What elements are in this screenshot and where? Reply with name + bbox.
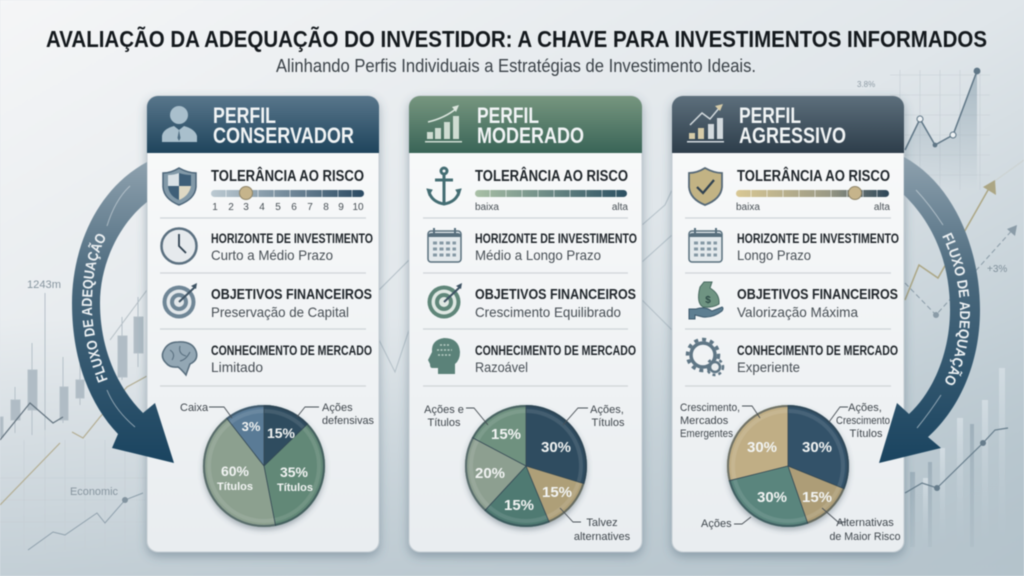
pie chart: agressivo: 30% <box>802 439 832 456</box>
arrow: left flow: FLUXO DE ADEQUAÇÃO <box>81 233 108 384</box>
header: conservador <box>147 96 379 153</box>
horizon text: Curto a Médio Prazo <box>211 247 333 263</box>
pie chart: moderado: 15% <box>542 484 572 501</box>
pie chart: moderado: 30% <box>541 439 571 456</box>
background chart: left <box>0 279 147 550</box>
risk slider: TOLERÂNCIA AO RISCO <box>475 166 628 185</box>
icon: calendar <box>689 228 722 262</box>
objectives text: Preservação de Capital <box>211 304 349 320</box>
risk slider: baixa <box>475 202 499 213</box>
pie labels: moderado: alternatives <box>574 531 631 543</box>
pie chart: moderado: 15% <box>491 426 521 443</box>
pie labels: agressivo: Ações <box>701 518 732 530</box>
icon: target <box>162 283 197 318</box>
arrow: left flow <box>71 162 174 464</box>
pie labels: moderado <box>424 404 631 543</box>
horizon text <box>475 231 637 263</box>
icon: brain <box>162 342 197 375</box>
risk slider: alta <box>612 202 628 213</box>
horizon text: Longo Prazo <box>737 247 811 263</box>
background chart: right: +3% <box>987 264 1007 275</box>
objectives text <box>211 286 372 320</box>
risk slider: 7 <box>307 202 313 213</box>
pie labels: agressivo: de Maior Risco <box>830 531 900 543</box>
icon: clock <box>162 228 196 264</box>
header: moderado: MODERADO <box>477 123 584 148</box>
pie chart: agressivo: 30% <box>747 439 777 456</box>
icon: shield <box>163 168 196 205</box>
risk slider: alta <box>874 202 890 213</box>
panel: perfil conservador <box>147 96 379 552</box>
background chart: left: Economic <box>70 486 118 498</box>
horizon text: Médio a Longo Prazo <box>475 247 601 263</box>
risk slider: 2 <box>228 202 234 213</box>
objectives text <box>475 286 636 320</box>
header: moderado: PERFIL <box>477 103 539 128</box>
objectives text: OBJETIVOS FINANCEIROS <box>737 286 898 303</box>
objectives text: OBJETIVOS FINANCEIROS <box>475 286 636 303</box>
risk slider: 1 <box>212 202 218 213</box>
risk slider: baixa <box>736 202 760 213</box>
pie chart: agressivo: 30% <box>757 489 787 506</box>
panel: perfil agressivo <box>672 96 904 552</box>
risk slider <box>736 166 890 213</box>
risk slider: TOLERÂNCIA AO RISCO <box>211 166 364 185</box>
risk slider <box>475 166 628 213</box>
icon: hand with money bag: $ <box>705 295 711 306</box>
pie labels: agressivo: Emergentes <box>680 428 733 440</box>
horizon text: HORIZONTE DE INVESTIMENTO <box>737 231 899 246</box>
pie labels: conservador: defensivas <box>322 415 374 427</box>
risk slider: 3 <box>243 202 249 213</box>
objectives text: Crescimento Equilibrado <box>475 304 621 320</box>
header: moderado <box>409 96 642 153</box>
knowledge text: Limitado <box>211 359 263 375</box>
pie labels: agressivo: Alternativas <box>836 517 894 529</box>
pie chart: conservador <box>203 405 325 527</box>
knowledge text: CONHECIMENTO DE MERCADO <box>475 343 636 358</box>
pie chart: conservador: 35% <box>280 464 309 480</box>
header: conservador: CONSERVADOR <box>213 123 354 148</box>
background chart: right <box>857 68 1024 547</box>
risk slider: 4 <box>259 202 265 213</box>
header: agressivo: AGRESSIVO <box>739 123 846 148</box>
pie labels: moderado: Ações, <box>590 404 624 416</box>
horizon text: HORIZONTE DE INVESTIMENTO <box>475 231 637 246</box>
knowledge text <box>737 343 898 375</box>
risk slider: 10 <box>352 202 364 213</box>
pie labels: moderado: Talvez <box>586 517 618 529</box>
pie labels: agressivo: Ações, <box>848 402 882 414</box>
pie chart: agressivo <box>727 405 849 527</box>
arrow: right flow <box>878 157 981 464</box>
objectives text <box>737 286 898 320</box>
pie labels: moderado: Ações e <box>424 404 464 416</box>
horizon text <box>737 231 899 263</box>
subtitle: Alinhando Perfis Individuais a Estratégias de Investimento Ideais. <box>276 56 756 76</box>
pie labels: conservador <box>180 402 374 427</box>
background chart: right: 3.8% <box>857 80 875 89</box>
pie labels: moderado: Títulos <box>591 417 625 429</box>
icon: head with brain <box>428 338 460 374</box>
knowledge text <box>475 343 636 375</box>
knowledge text: Razoável <box>475 359 528 375</box>
risk slider <box>211 166 364 213</box>
risk slider: TOLERÂNCIA AO RISCO <box>737 166 890 185</box>
icon: shield with check <box>689 168 722 205</box>
background lines between panels <box>379 190 672 372</box>
icon: calendar <box>428 228 461 262</box>
icon: gears <box>688 340 723 375</box>
pie labels: agressivo: Mercados <box>680 415 729 427</box>
background chart: left: 1243m <box>27 279 61 291</box>
pie labels: conservador: Ações <box>322 402 353 414</box>
pie labels: conservador: Caixa <box>180 402 209 414</box>
pie chart: moderado: 20% <box>475 465 505 482</box>
knowledge text <box>211 343 372 375</box>
objectives text: OBJETIVOS FINANCEIROS <box>211 286 372 303</box>
icon: target <box>428 283 462 318</box>
pie labels: agressivo: Crescimento, <box>680 402 740 414</box>
header: agressivo <box>672 96 904 153</box>
risk slider: 8 <box>323 202 329 213</box>
pie chart: conservador: 15% <box>267 425 296 441</box>
risk slider: 9 <box>338 202 344 213</box>
knowledge text: CONHECIMENTO DE MERCADO <box>737 343 898 358</box>
pie chart: agressivo: 15% <box>802 489 832 506</box>
panel: perfil moderado <box>409 96 642 552</box>
objectives text: Valorização Máxima <box>737 304 858 320</box>
pie labels: moderado: Títulos <box>427 417 461 429</box>
icon: anchor <box>427 168 461 204</box>
pie chart: moderado <box>465 405 587 527</box>
knowledge text: CONHECIMENTO DE MERCADO <box>211 343 372 358</box>
knowledge text: Experiente <box>737 359 800 375</box>
risk slider: 6 <box>291 202 297 213</box>
pie labels: agressivo <box>680 402 900 543</box>
header: conservador: PERFIL <box>213 103 276 128</box>
header: agressivo: PERFIL <box>739 103 801 128</box>
pie labels: agressivo: Crescimento <box>836 415 890 427</box>
arrow: right flow: FLUXO DE ADEQUAÇÃO <box>942 232 971 386</box>
pie labels: agressivo: Títulos <box>849 428 883 440</box>
horizon text <box>211 231 373 263</box>
pie chart: moderado: 15% <box>504 497 534 514</box>
risk slider: 5 <box>275 202 281 213</box>
pie chart: conservador: 3% <box>242 419 261 434</box>
pie chart: conservador: Títulos <box>217 481 253 493</box>
pie chart: conservador: 60% <box>221 463 250 479</box>
horizon text: HORIZONTE DE INVESTIMENTO <box>211 231 373 246</box>
pie chart: conservador: Títulos <box>277 482 313 494</box>
icon: hand with money bag <box>689 282 723 319</box>
